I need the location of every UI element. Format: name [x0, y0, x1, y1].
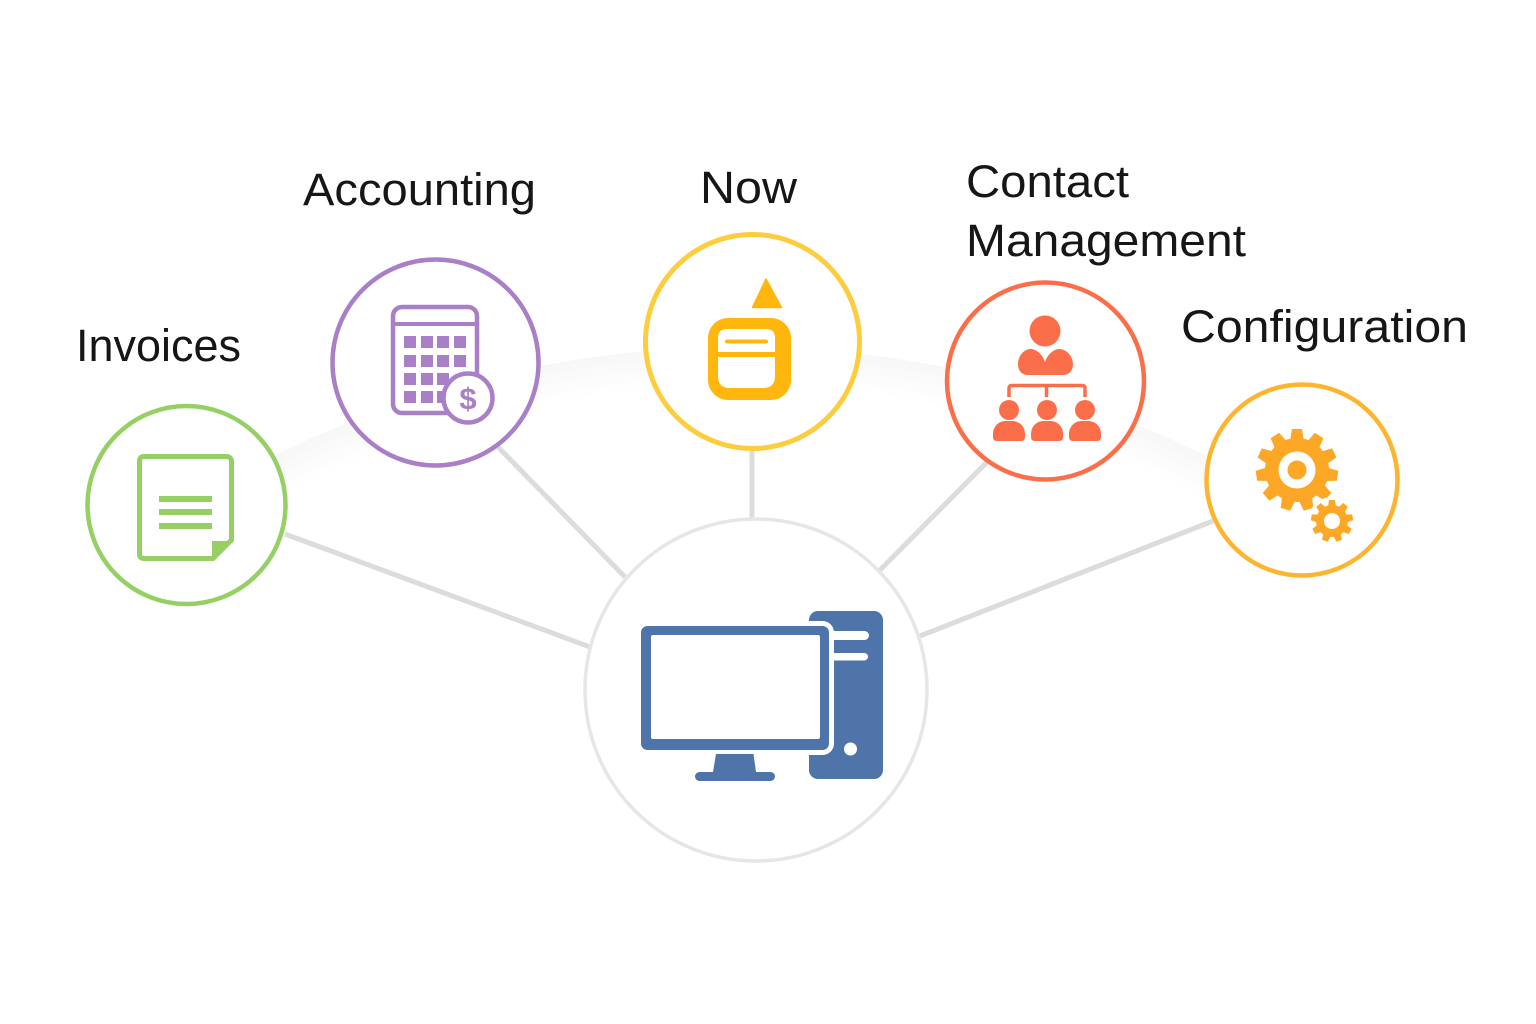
background arc band [270, 347, 1215, 505]
icon: desktop computer [638, 611, 883, 781]
node: now [646, 234, 860, 448]
icon: calendar with dollar [393, 307, 492, 422]
label: now: Now [700, 162, 798, 213]
icon: container with triangle [708, 279, 791, 400]
icon: document [140, 456, 233, 561]
node: configuration [1206, 384, 1398, 576]
icon: org chart [993, 316, 1101, 441]
label: contact management: Contact [966, 156, 1130, 207]
node: contact management [947, 282, 1144, 480]
label: invoices: Invoices [76, 320, 241, 371]
label: contact management [966, 156, 1247, 266]
label: contact management: Management [966, 215, 1247, 266]
large gear [1255, 429, 1339, 511]
icon: calendar with dollar: $ [459, 381, 477, 416]
node: invoices [88, 406, 286, 604]
central computer node [585, 519, 927, 861]
label: accounting: Accounting [303, 164, 536, 215]
icon: gears [1255, 429, 1356, 545]
label: configuration: Configuration [1181, 301, 1468, 352]
node: accounting [332, 260, 538, 466]
connector lines [285, 447, 1213, 647]
small gear [1308, 497, 1356, 545]
